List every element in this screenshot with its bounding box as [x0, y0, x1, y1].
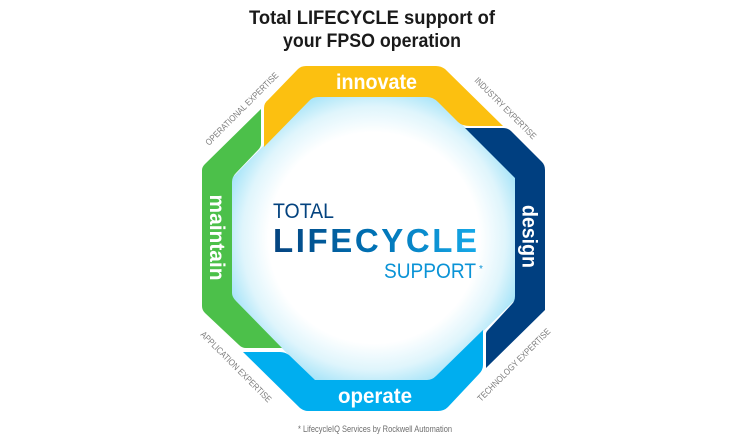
segment: innovate [264, 66, 503, 147]
center text: total lifecycle support [273, 200, 483, 283]
title [249, 8, 496, 52]
segment: maintain: maintain [205, 194, 229, 280]
central glow panel [232, 95, 517, 382]
footnote: * LifecycleIQ Services by Rockwell Automation [298, 424, 452, 434]
segment: maintain [202, 109, 282, 348]
title: Total LIFECYCLE support of [249, 8, 496, 29]
center text: total lifecycle support: * [479, 264, 483, 275]
title: your FPSO operation [283, 31, 461, 52]
label: application expertise: APPLICATION EXPERTISE [199, 329, 274, 404]
center text: total lifecycle support: LIFECYCLE [273, 222, 477, 259]
segment: innovate: innovate [336, 70, 417, 94]
segment: operate [243, 330, 483, 411]
segment: design: design [518, 205, 542, 268]
center text: total lifecycle support: SUPPORT [384, 260, 476, 283]
segment: operate: operate [338, 384, 412, 408]
segment: design [465, 128, 545, 368]
label: technology expertise: TECHNOLOGY EXPERTISE [475, 326, 552, 403]
label: operational expertise: OPERATIONAL EXPERTISE [203, 70, 280, 147]
center text: total lifecycle support: TOTAL [273, 200, 334, 223]
label: industry expertise: INDUSTRY EXPERTISE [473, 75, 538, 141]
